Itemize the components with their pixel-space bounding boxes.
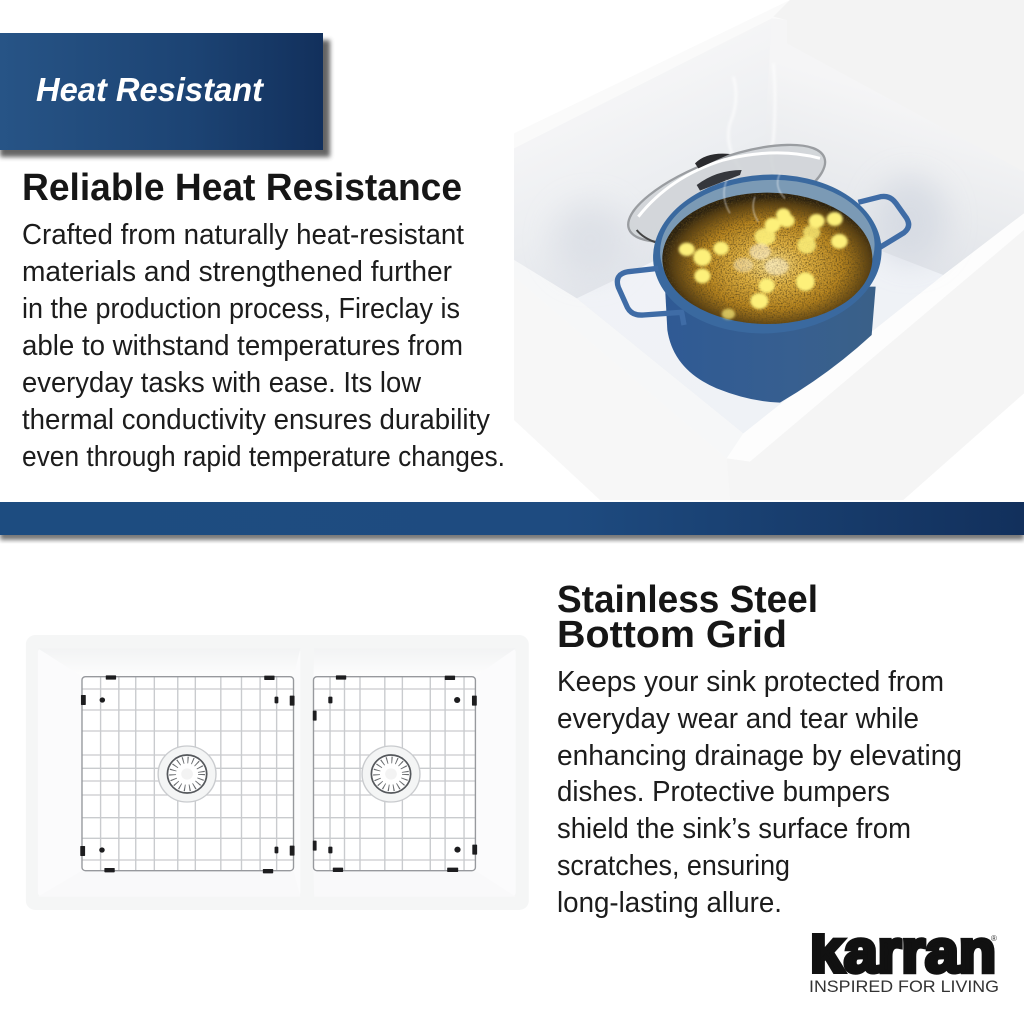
- text block: bottom grid description: scratches, ensuring: [557, 850, 790, 882]
- left bottom grid: [80, 675, 295, 873]
- logo: karran: [810, 933, 998, 992]
- icon: left pot handle: [617, 268, 684, 325]
- icon: glass lid: [617, 125, 836, 262]
- text block: heat resistance description: [22, 219, 505, 473]
- text block: bottom grid description: enhancing drainage by elevating: [557, 740, 962, 772]
- bumpers: [313, 675, 477, 872]
- logo: karran: ®: [991, 934, 997, 943]
- icon: right drain strainer: [362, 746, 420, 802]
- heading: Reliable Heat Resistance: Reliable Heat Resistance: [22, 167, 462, 209]
- left basin: [38, 648, 300, 897]
- text block: bottom grid description: [557, 666, 962, 919]
- text block: bottom grid description: dishes. Protective bumpers: [557, 776, 890, 808]
- right bottom grid: [313, 675, 477, 872]
- icon: boiling liquid: [662, 193, 872, 324]
- logo: karran: karran: [810, 918, 996, 985]
- banner text: Heat Resistant: [36, 71, 265, 108]
- divider band: [0, 502, 1024, 540]
- text block: heat resistance description: everyday tasks with ease. Its low: [22, 367, 422, 399]
- heading: Stainless Steel Bottom Grid: Bottom Grid: [557, 614, 787, 656]
- text block: heat resistance description: materials and strengthened further: [22, 256, 452, 288]
- text block: bottom grid description: Keeps your sink protected from: [557, 666, 944, 698]
- label banner: Heat Resistant: [0, 33, 330, 157]
- logo tagline: INSPIRED FOR LIVING: [809, 977, 999, 996]
- icon: left drain strainer: [158, 746, 216, 802]
- icon: pot rim: [649, 169, 886, 339]
- text block: bottom grid description: shield the sink’s surface from: [557, 813, 911, 845]
- icon: steam front: [724, 173, 785, 222]
- icon: steam behind: [728, 63, 780, 187]
- bumpers: [80, 675, 295, 873]
- icon: bubbles: [679, 208, 848, 319]
- photo: white fireclay sink with boiling pot: [514, 0, 1024, 500]
- text block: heat resistance description: even through rapid temperature changes.: [22, 441, 505, 473]
- icon: pot inner wall: [657, 174, 878, 322]
- right basin: [313, 648, 516, 897]
- text block: bottom grid description: long-lasting allure.: [557, 887, 782, 919]
- text block: heat resistance description: thermal conductivity ensures durability: [22, 404, 490, 436]
- icon: pot body: [665, 287, 876, 403]
- text block: bottom grid description: everyday wear and tear while: [557, 703, 919, 735]
- heading: Stainless Steel Bottom Grid: Stainless Steel: [557, 579, 818, 621]
- sink rim: [26, 635, 529, 910]
- text block: heat resistance description: able to withstand temperatures from: [22, 330, 463, 362]
- text block: heat resistance description: in the production process, Fireclay is: [22, 293, 460, 325]
- sink body: [514, 0, 1024, 500]
- heading: Stainless Steel Bottom Grid: [557, 579, 818, 656]
- icon: right pot handle: [858, 196, 909, 248]
- photo: double bowl sink with bottom grids, top view: [26, 635, 529, 910]
- text block: heat resistance description: Crafted from naturally heat-resistant: [22, 219, 464, 251]
